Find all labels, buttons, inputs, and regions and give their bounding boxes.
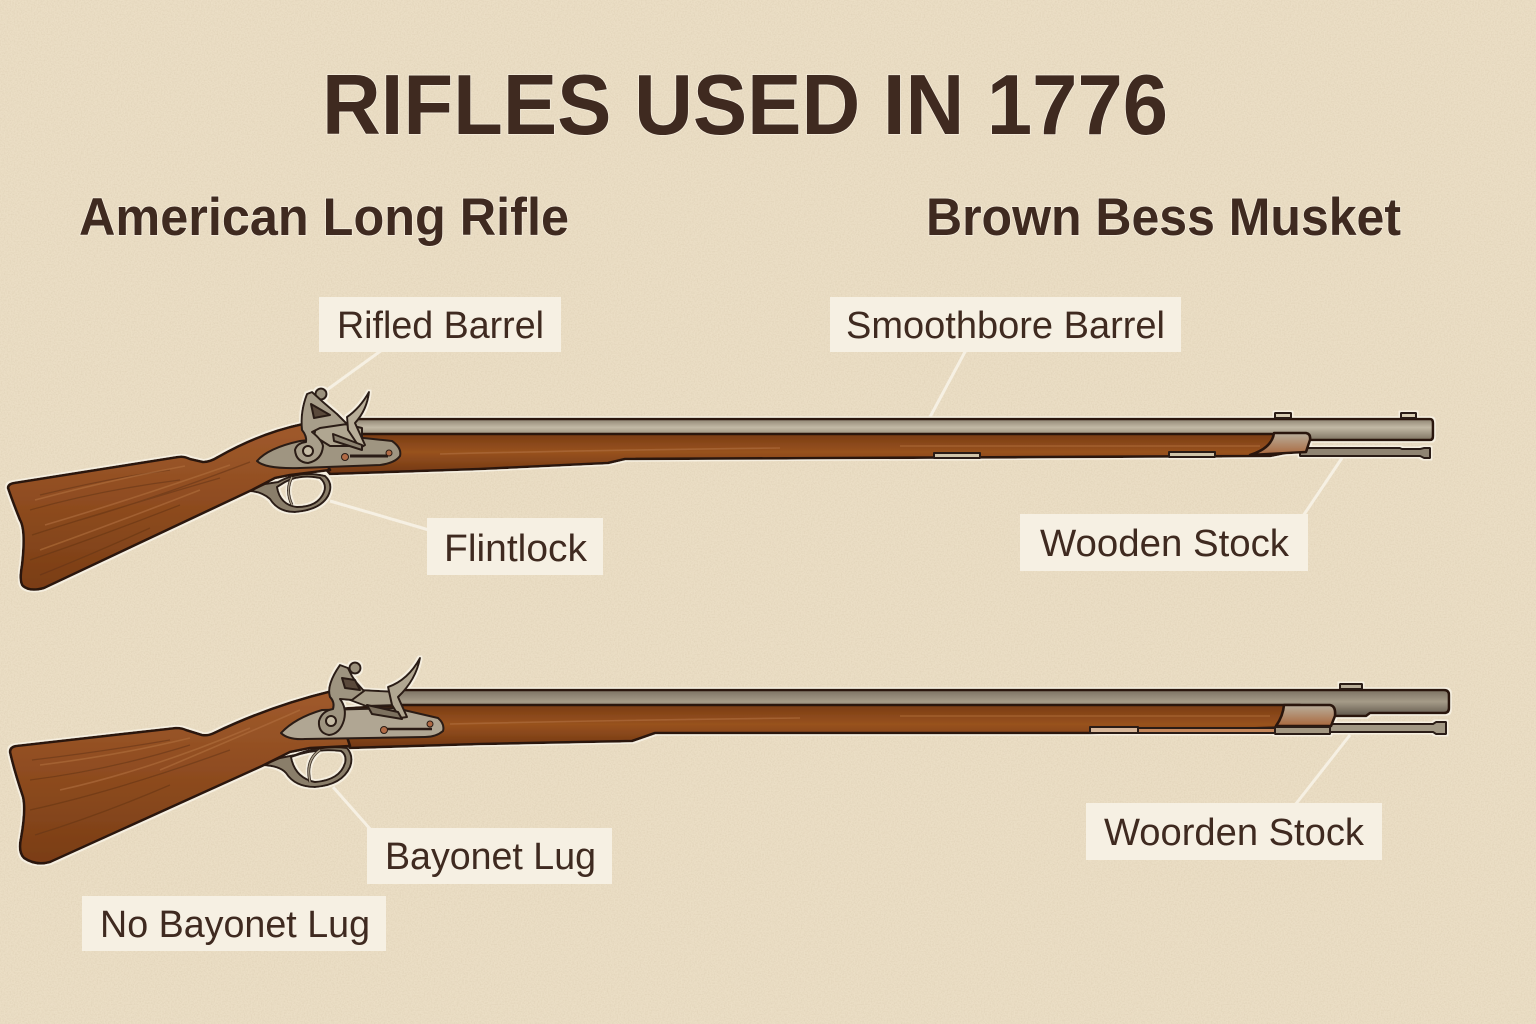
rifle: American Long Rifle (8, 388, 1433, 590)
ramrod (1300, 448, 1430, 458)
callout: No Bayonet Lug: No Bayonet Lug (100, 904, 370, 946)
flintlock mechanism (257, 388, 400, 468)
wood grain (30, 710, 300, 835)
callout: Rifled Barrel: Rifled Barrel (337, 305, 544, 347)
lock plate (257, 436, 400, 468)
lower plates (1090, 727, 1330, 734)
ramrod (1320, 722, 1446, 734)
callout: Woorden Stock: Woorden Stock (1104, 812, 1365, 854)
callout: Wooden Stock (1020, 458, 1342, 571)
cock knob (350, 662, 360, 674)
cock (295, 392, 347, 463)
callout: Smoothbore Barrel: Smoothbore Barrel (846, 305, 1165, 347)
front sights (1275, 413, 1416, 418)
callout: Woorden Stock (1086, 735, 1382, 860)
callout: No Bayonet Lug (82, 896, 386, 951)
barrel (350, 419, 1433, 440)
trigger guard (250, 474, 330, 512)
nose cap (1250, 433, 1310, 455)
callout: Flintlock (330, 501, 603, 575)
butt stock (8, 424, 330, 590)
callout: Smoothbore Barrel (830, 297, 1181, 417)
callout: Wooden Stock: Wooden Stock (1040, 523, 1290, 565)
forestock highlight (450, 716, 1270, 724)
frizzen leaf (333, 434, 362, 450)
forestock highlight (440, 446, 1260, 454)
callout: Bayonet Lug (333, 787, 612, 884)
nose cap (1276, 705, 1335, 726)
front sight (1340, 684, 1362, 689)
callout: Flintlock: Flintlock (444, 528, 588, 570)
heading: American Long Rifle: American Long Rifle (79, 188, 569, 247)
barrel (395, 690, 1449, 716)
forestock (320, 705, 1300, 748)
trigger guard (263, 747, 351, 787)
cock (319, 665, 364, 735)
flintlock mechanism (281, 658, 443, 739)
forestock (300, 434, 1300, 474)
rifle: Brown Bess Musket (10, 658, 1449, 863)
butt stock (10, 691, 350, 863)
frizzen (347, 392, 369, 448)
pan bridge (350, 690, 398, 706)
cock knob (316, 388, 326, 400)
callout: Rifled Barrel (319, 297, 561, 392)
frizzen (388, 658, 420, 718)
frizzen leaf (367, 705, 402, 719)
wood grain (30, 462, 250, 575)
lock plate (281, 708, 443, 739)
title: RIFLES USED IN 1776 (322, 58, 1168, 153)
pan bridge (314, 418, 362, 446)
callout: Bayonet Lug: Bayonet Lug (385, 836, 596, 878)
lower plate (934, 453, 980, 458)
heading: Brown Bess Musket: Brown Bess Musket (926, 188, 1401, 247)
